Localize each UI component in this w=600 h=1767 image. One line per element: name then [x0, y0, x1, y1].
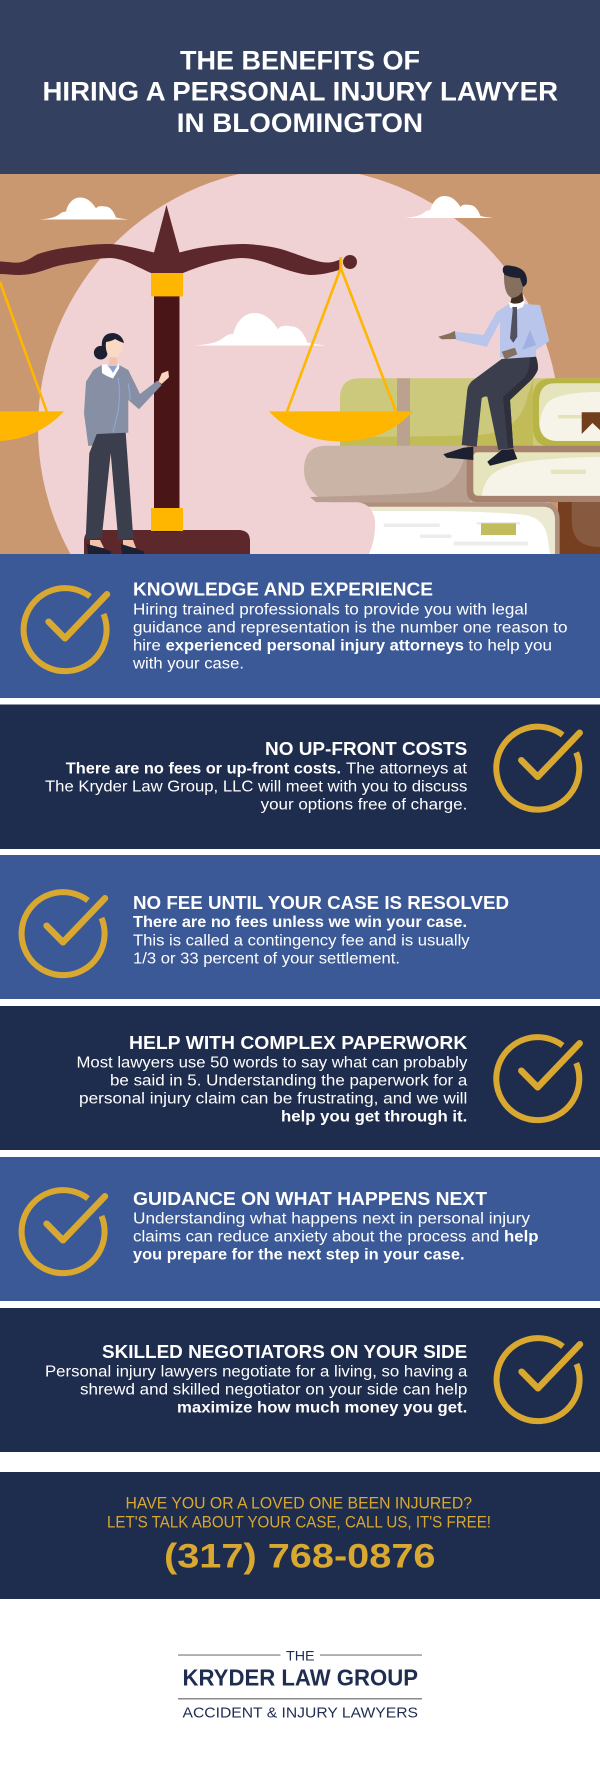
- title: [42, 46, 558, 138]
- text block: guidance and representation is the number one reason to: [133, 619, 568, 636]
- logo: The Kryder Law Group: THE: [286, 1648, 315, 1664]
- text block: be said in 5. Understanding the paperwork for a: [110, 1073, 468, 1090]
- text block: There are no fees unless we win your case.: [133, 914, 467, 931]
- text block: help: [504, 1229, 538, 1246]
- text block: Understanding what happens next in personal injury: [133, 1211, 530, 1228]
- beam: [0, 205, 341, 275]
- left pan: [0, 282, 64, 441]
- logo: The Kryder Law Group: KRYDER LAW GROUP: [182, 1665, 418, 1691]
- text block: [133, 914, 470, 967]
- icon: cloud right: [404, 196, 492, 218]
- panel: no fee until your case is resolved: [0, 855, 600, 999]
- icon: check mark in circle: [22, 892, 105, 975]
- heading: SKILLED NEGOTIATORS ON YOUR SIDE: [102, 1341, 467, 1362]
- text block: personal injury claim can be frustrating, and we will: [79, 1091, 467, 1108]
- pole: [154, 252, 180, 532]
- text block: you prepare for the next step in your case.: [133, 1247, 465, 1264]
- title: THE BENEFITS OF: [180, 46, 420, 76]
- text block: The Kryder Law Group, LLC will meet with you to discuss: [45, 778, 468, 795]
- icon: check mark in circle: [22, 1190, 105, 1273]
- text block: experienced personal injury attorneys: [166, 637, 464, 654]
- text block: your options free of charge.: [261, 797, 467, 814]
- text block: [76, 1055, 468, 1126]
- call to action text: LET'S TALK ABOUT YOUR CASE, CALL US, IT'S FREE!: [107, 1513, 491, 1531]
- heading: KNOWLEDGE AND EXPERIENCE: [133, 579, 433, 600]
- logo: The Kryder Law Group: ACCIDENT & INJURY LAWYERS: [182, 1704, 418, 1721]
- text block: Most lawyers use 50 words to say what can probably: [76, 1055, 468, 1072]
- scales of justice: [0, 205, 413, 554]
- text block: [132, 601, 568, 672]
- heading: GUIDANCE ON WHAT HAPPENS NEXT: [133, 1188, 488, 1209]
- panel: skilled negotiators on your side: [0, 1308, 600, 1452]
- icon: cloud centre: [195, 313, 325, 346]
- text block: The attorneys at: [346, 760, 468, 777]
- call to action text: HAVE YOU OR A LOVED ONE BEEN INJURED?: [126, 1495, 472, 1513]
- text block: help you get through it.: [281, 1109, 467, 1126]
- panel: help with complex paperwork: [0, 1006, 600, 1150]
- text block: There are no fees or up-front costs.: [66, 760, 341, 777]
- text block: Hiring trained professionals to provide you with legal: [133, 601, 528, 618]
- heading: HELP WITH COMPLEX PAPERWORK: [129, 1032, 468, 1053]
- heading: NO FEE UNTIL YOUR CASE IS RESOLVED: [133, 892, 509, 913]
- text block: 1/3 or 33 percent of your settlement.: [133, 950, 400, 967]
- text block: [133, 1211, 538, 1264]
- logo: The Kryder Law Group: [178, 1648, 422, 1721]
- book stack: [300, 378, 600, 554]
- call to action text: [107, 1495, 491, 1531]
- base: [84, 530, 250, 554]
- icon: check mark in circle: [497, 1338, 580, 1421]
- title: IN BLOOMINGTON: [177, 108, 423, 138]
- right pan: [269, 257, 413, 441]
- panel: call to action: [0, 1472, 600, 1599]
- top book: [340, 378, 600, 447]
- panel: knowledge and experience: [0, 554, 600, 698]
- text block: to help you: [468, 637, 552, 654]
- text block: hire: [133, 637, 161, 654]
- text block: [45, 1364, 468, 1417]
- text block: claims can reduce anxiety about the process and: [133, 1229, 499, 1246]
- collars: [151, 273, 183, 296]
- text block: maximize how much money you get.: [177, 1400, 467, 1417]
- phone number: (317) 768-0876: [164, 1537, 436, 1575]
- icon: check mark in circle: [496, 727, 580, 810]
- icon: check mark in circle: [496, 1037, 580, 1120]
- title: HIRING A PERSONAL INJURY LAWYER: [42, 77, 558, 107]
- illustration: scales of justice, lawyers and law books: [0, 174, 600, 554]
- woman lawyer: [84, 333, 169, 555]
- icon: cloud left: [40, 198, 128, 220]
- text block: with your case.: [132, 655, 244, 672]
- text block: [45, 760, 468, 814]
- middle book: [304, 446, 480, 502]
- man lawyer: [438, 265, 549, 466]
- text block: This is called a contingency fee and is usually: [133, 932, 470, 949]
- icon: check mark in circle: [24, 588, 107, 671]
- panel: guidance on what happens next: [0, 1157, 600, 1301]
- heading: NO UP-FRONT COSTS: [265, 738, 467, 759]
- bottom book: [558, 502, 600, 554]
- text block: shrewd and skilled negotiator on your side can help: [80, 1382, 467, 1399]
- text block: Personal injury lawyers negotiate for a living, so having a: [45, 1364, 468, 1381]
- panel: title header: [0, 0, 600, 174]
- panel: no up-front costs: [0, 704, 600, 849]
